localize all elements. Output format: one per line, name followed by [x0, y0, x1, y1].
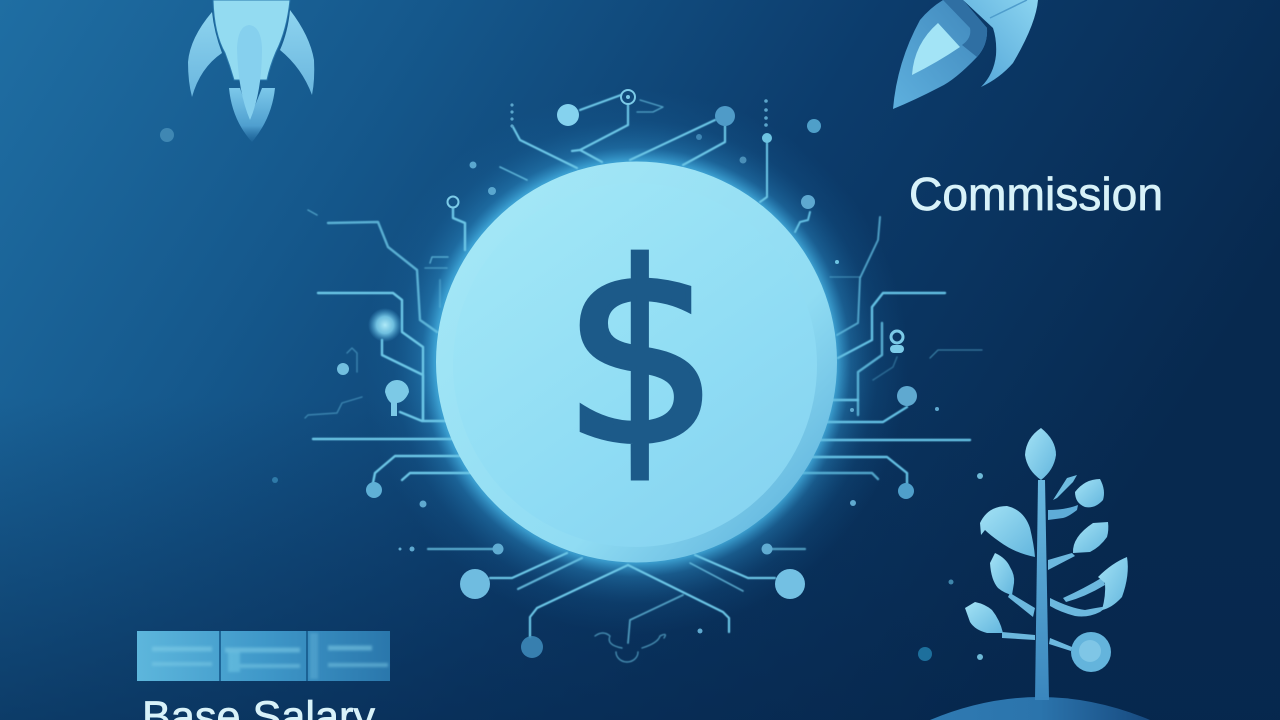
circuit traces: left side [305, 208, 470, 483]
circuit nodes [160, 90, 983, 661]
circuit traces: top [500, 95, 767, 202]
plant ground [930, 697, 1150, 720]
circuit traces: bottom [428, 549, 805, 662]
icon: growing plant [930, 428, 1150, 720]
label: Commission: Commission [909, 168, 1163, 220]
circuit network [305, 95, 982, 662]
dollar sign: $ [562, 212, 720, 500]
glow behind central coin [364, 90, 908, 634]
table dividers and rows [152, 633, 388, 679]
central coin with dollar sign [436, 162, 837, 562]
icon: salary bar table [137, 631, 390, 681]
circuit traces: right side [795, 212, 982, 485]
plant branches and leaves [965, 428, 1128, 672]
icon: rocket top left [188, 0, 314, 142]
plant stem [1035, 480, 1049, 700]
coin inner disc [453, 183, 817, 547]
table grid lines [220, 631, 307, 681]
icon: rocket top right [893, 0, 1038, 109]
